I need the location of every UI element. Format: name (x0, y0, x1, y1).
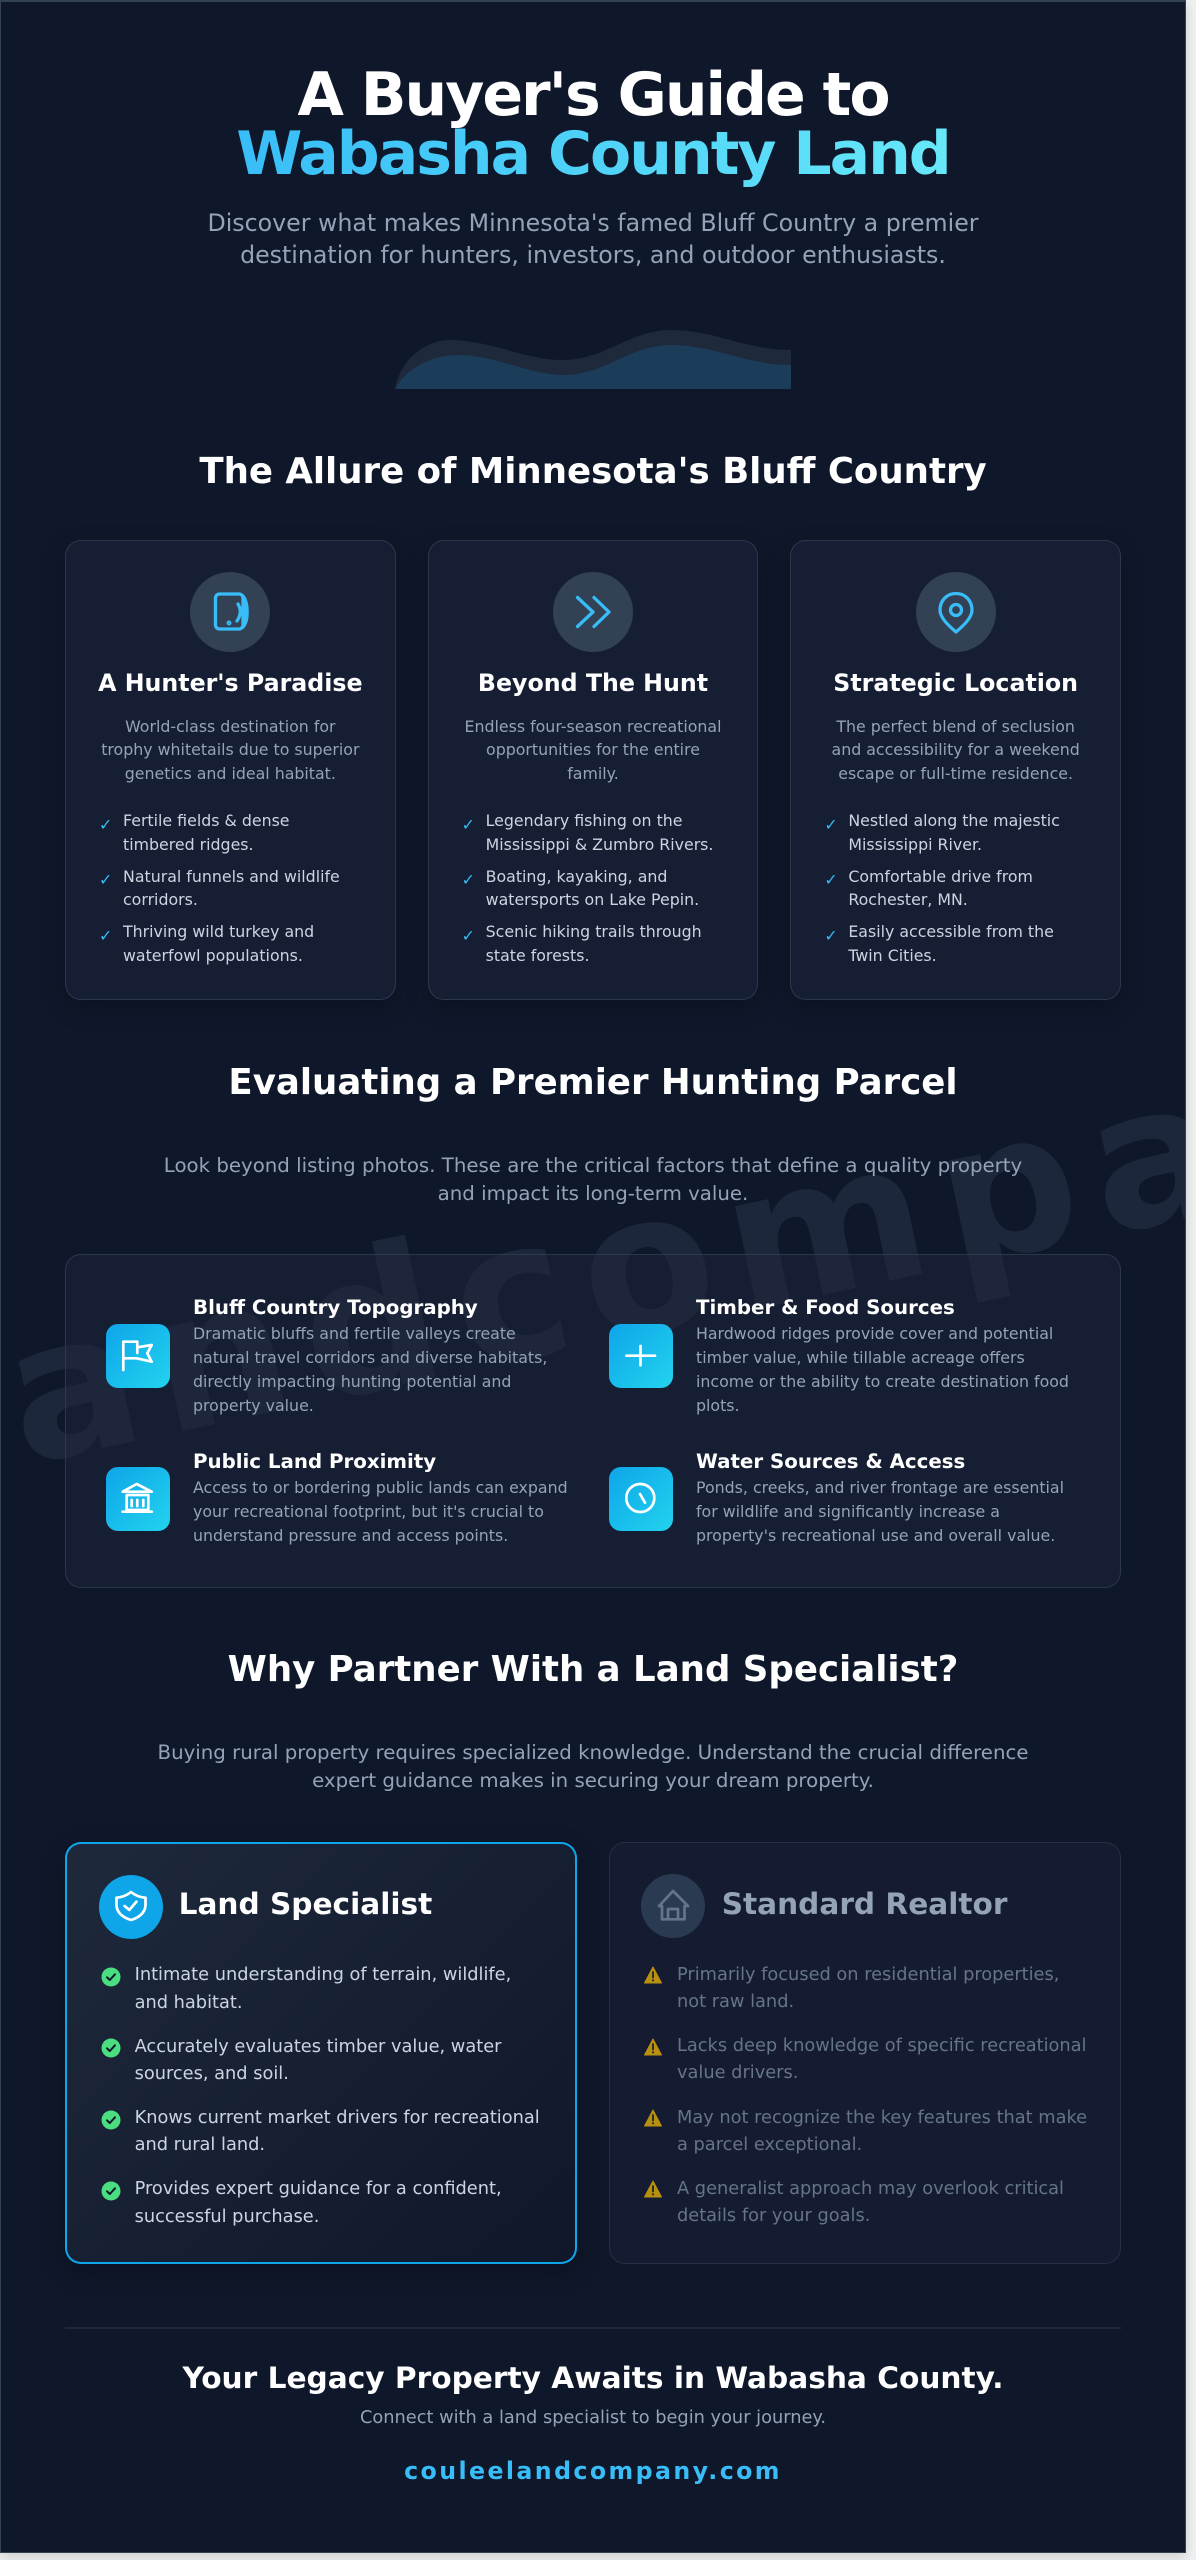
subtitle (207, 209, 979, 269)
drawback item: May not recognize the key features that make (677, 2106, 1087, 2128)
icon: plus (609, 1324, 673, 1388)
advantage item (102, 2178, 502, 2227)
icon: flag (106, 1324, 170, 1388)
factor text: property value. (193, 1396, 314, 1415)
card heading: Beyond The Hunt (478, 669, 708, 697)
list item: Comfortable drive from (848, 867, 1033, 886)
factor text: directly impacting hunting potential and (193, 1372, 511, 1391)
section intro: specialist (158, 1741, 1028, 1792)
drawback item: not raw land. (677, 1991, 794, 2012)
list item: ✓ (824, 814, 838, 834)
list item (99, 922, 314, 965)
panel heading: Land Specialist (179, 1887, 432, 1921)
factor text: Access to or bordering public lands can expand (193, 1478, 568, 1497)
factor text (193, 1478, 568, 1545)
list item: state forests. (486, 946, 589, 965)
factor: public land (106, 1450, 568, 1545)
card description: trophy whitetails due to superior (101, 740, 359, 759)
factor text: timber value, while tillable acreage offers (696, 1348, 1025, 1367)
factor text: Hardwood ridges provide cover and potential (696, 1324, 1053, 1343)
factor text: Ponds, creeks, and river frontage are essential (696, 1478, 1064, 1497)
list item: ✓ (99, 926, 112, 944)
card description (101, 716, 360, 783)
advantage item (102, 1964, 511, 2013)
advantage item: and rural land. (135, 2134, 265, 2155)
list item (824, 922, 1054, 965)
icon: device target (190, 572, 270, 652)
list item: Fertile fields & dense (123, 811, 290, 830)
list item: Twin Cities. (848, 946, 937, 965)
drawback item: Lacks deep knowledge of specific recreational (677, 2035, 1086, 2056)
factor heading: Bluff Country Topography (193, 1296, 478, 1319)
factor text: understand pressure and access points. (193, 1526, 508, 1545)
card description: Endless four-season recreational (464, 716, 721, 736)
card heading: Strategic Location (833, 669, 1078, 697)
section intro: specialist: Buying rural property requires specialized knowledge. Understand the crucial difference (158, 1741, 1028, 1764)
drawback item: a parcel exceptional. (677, 2134, 862, 2155)
list item: Rochester, MN. (848, 890, 968, 909)
panel: land specialist (65, 1842, 577, 2264)
factor heading: Water Sources & Access (696, 1450, 965, 1473)
section intro: specialist: expert guidance makes in securing your dream property. (312, 1769, 874, 1792)
factor text: plots. (696, 1396, 740, 1415)
card description (832, 716, 1080, 783)
icon: building (106, 1467, 170, 1531)
list item: Mississippi & Zumbro Rivers. (486, 835, 713, 854)
list item: corridors. (123, 890, 198, 909)
decorative bluff wave graphic (395, 330, 791, 389)
list item (824, 867, 1033, 909)
factor heading: Timber & Food Sources (696, 1296, 955, 1319)
subtitle: Discover what makes Minnesota's famed Bluff Country a premier (207, 209, 979, 237)
list item (462, 867, 699, 909)
list item: Boating, kayaking, and (486, 867, 667, 886)
advantage item: sources, and soil. (135, 2063, 289, 2084)
factor text: property's recreational use and overall value. (696, 1526, 1055, 1545)
list item: ✓ (824, 926, 838, 944)
list item (462, 922, 702, 965)
subtitle: destination for hunters, investors, and outdoor enthusiasts. (240, 241, 946, 269)
factor text (696, 1324, 1069, 1415)
list item (99, 867, 340, 909)
factor: timber (609, 1296, 1069, 1415)
icon: house (641, 1874, 705, 1938)
factor: topography (106, 1296, 547, 1415)
list item: ✓ (462, 870, 475, 889)
list item (462, 811, 713, 854)
panel: strategic location (790, 540, 1121, 1000)
list item: Scenic hiking trails through (486, 922, 702, 941)
card heading: A Hunter's Paradise (98, 669, 363, 697)
list item: timbered ridges. (123, 835, 254, 854)
advantage item: Provides expert guidance for a confident, (135, 2178, 502, 2199)
panel: beyond the hunt (428, 540, 758, 1000)
heading: evaluating section: Evaluating a Premier Hunting Parcel (228, 1062, 958, 1103)
heading: specialist section: Why Partner With a Land Specialist? (228, 1649, 958, 1690)
card description: opportunities for the entire (486, 740, 700, 759)
card description: escape or full-time residence. (838, 764, 1073, 783)
drawback item: details for your goals. (677, 2205, 870, 2226)
drawback item: A generalist approach may overlook critical (677, 2178, 1064, 2199)
advantage item: successful purchase. (135, 2206, 319, 2227)
footer website link: couleelandcompany.com (404, 2457, 782, 2485)
factor text: natural travel corridors and diverse habitats, (193, 1348, 547, 1367)
factor text: income or the ability to create destination food (696, 1372, 1069, 1391)
list item: ✓ (462, 926, 475, 944)
factor: water (609, 1450, 1064, 1545)
factor text (696, 1478, 1064, 1545)
drawback item: value drivers. (677, 2062, 798, 2083)
card description: family. (567, 764, 619, 783)
list item: ✓ (99, 814, 112, 834)
drawback item: Primarily focused on residential properties, (677, 1964, 1059, 1985)
list item: waterfowl populations. (123, 946, 303, 965)
list item: Legendary fishing on the (486, 811, 682, 830)
factor text: your recreational footprint, but it's crucial to (193, 1502, 544, 1521)
icon: double chevron (553, 572, 633, 652)
advantage item (102, 2036, 502, 2084)
section intro: evaluating: Look beyond listing photos. These are the critical factors that define a quality property (164, 1154, 1022, 1177)
panel: standard realtor (609, 1842, 1121, 2264)
factor heading: Public Land Proximity (193, 1450, 436, 1473)
list item (99, 811, 290, 854)
title (236, 60, 950, 189)
list item: Thriving wild turkey and (123, 922, 314, 941)
footer heading: Your Legacy Property Awaits in Wabasha County. (182, 2360, 1004, 2394)
icon: clock (609, 1467, 673, 1531)
drawback item (644, 1964, 1059, 2012)
factor text (193, 1324, 547, 1415)
list item: watersports on Lake Pepin. (486, 890, 699, 909)
list item: Natural funnels and wildlife (123, 867, 340, 886)
heading: allure section: The Allure of Minnesota's Bluff Country (199, 451, 987, 492)
advantage item: Knows current market drivers for recreational (135, 2107, 540, 2128)
advantage item (102, 2107, 540, 2155)
panel: evaluation factors (65, 1254, 1121, 1588)
list item: Nestled along the majestic (848, 811, 1060, 830)
card description (464, 716, 721, 783)
card description: and accessibility for a weekend (832, 740, 1080, 759)
card description: genetics and ideal habitat. (125, 764, 336, 783)
card description: The perfect blend of seclusion (836, 716, 1075, 736)
advantage item: Intimate understanding of terrain, wildlife, (135, 1964, 511, 1985)
list item (824, 811, 1060, 854)
list item: ✓ (462, 814, 475, 834)
section intro: evaluating (164, 1154, 1022, 1205)
title: Wabasha County Land (236, 119, 950, 189)
title: A Buyer's Guide to (297, 60, 889, 130)
panel: a hunter's paradise (65, 540, 396, 1000)
list item: ✓ (824, 870, 838, 889)
list item: ✓ (99, 870, 112, 889)
advantage item: Accurately evaluates timber value, water (135, 2036, 501, 2057)
list item: Easily accessible from the (848, 922, 1054, 941)
advantage item: and habitat. (135, 1992, 242, 2013)
icon: map pin (916, 572, 996, 652)
factor text: for wildlife and significantly increase a (696, 1502, 1000, 1521)
footer text: Connect with a land specialist to begin your journey. (360, 2406, 826, 2428)
drawback item (644, 2035, 1086, 2083)
card description: World-class destination for (125, 716, 336, 736)
section intro: evaluating: and impact its long-term value. (438, 1182, 748, 1205)
icon: shield (99, 1875, 163, 1939)
factor text: Dramatic bluffs and fertile valleys create (193, 1324, 516, 1343)
drawback item (644, 2106, 1087, 2155)
drawback item (644, 2178, 1064, 2226)
list item: Mississippi River. (848, 835, 982, 854)
panel heading: Standard Realtor (722, 1887, 1007, 1921)
